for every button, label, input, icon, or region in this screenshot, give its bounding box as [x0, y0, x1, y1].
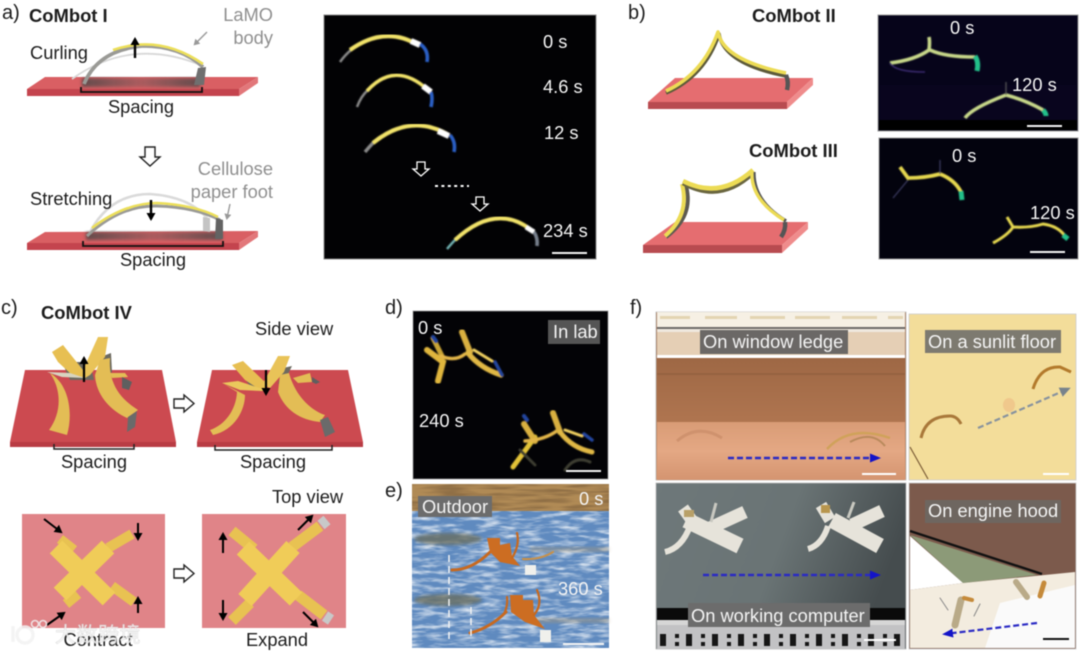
tag: On engine hood [928, 500, 1058, 521]
scale bar [552, 252, 587, 254]
CoMbot II diagram [648, 32, 813, 109]
watermark logo [13, 620, 46, 643]
robot 120 s [993, 217, 1068, 243]
scale bar [864, 639, 896, 641]
arrow: stretching down [150, 200, 152, 219]
label: spacing: Spacing [240, 451, 306, 472]
tag: in lab: In lab [553, 321, 598, 342]
scale bar [1043, 473, 1069, 475]
white foot [525, 565, 536, 575]
side view expanded [197, 356, 363, 447]
robots [940, 582, 1044, 625]
hollow arrows and dots [413, 162, 488, 211]
tag: On a sunlit floor [928, 331, 1056, 352]
robot frame 12 s [365, 125, 454, 152]
robot at 240 s [513, 413, 592, 470]
label: stretching: Stretching [30, 188, 112, 209]
robot 120 s [965, 82, 1046, 118]
label: contract: Contract [63, 629, 133, 650]
robot at 0 s [427, 332, 502, 381]
outdoor background [412, 484, 609, 648]
panel a: CoMbot I schematic [2, 2, 274, 270]
direction arrow [978, 389, 1068, 428]
bracket: spacing [83, 241, 223, 246]
panel b: photo CoMbot II [878, 15, 1078, 131]
white foot [540, 630, 551, 642]
label: side view: Side view [255, 318, 334, 339]
robot 0 s [890, 37, 978, 72]
timestamps: 12 s [544, 122, 579, 143]
panel b: CoMbot II and III schematics [628, 2, 838, 253]
arrow: curling up [134, 39, 136, 58]
panel b: photo CoMbot III [879, 138, 1078, 259]
timestamps [558, 488, 603, 599]
arrow: up [83, 358, 85, 382]
dashed guides [449, 555, 471, 640]
panel label a: a) [2, 2, 20, 24]
white robot left [665, 503, 745, 552]
arrow: to LaMO body [195, 32, 207, 44]
bracket: spacing [54, 444, 134, 449]
watermark [13, 620, 141, 647]
contract arrows [44, 519, 138, 625]
timestamps: 234 s [543, 220, 588, 241]
timestamps: 360 s [558, 578, 603, 599]
panel label e: e) [385, 480, 403, 502]
timestamps: 0 s [418, 317, 442, 338]
timestamps [543, 31, 588, 241]
side view contracted [10, 337, 176, 447]
timestamps: 120 s [1012, 74, 1057, 95]
blue direction arrow [703, 574, 878, 576]
label: spacing: Spacing [108, 96, 174, 117]
timestamps [418, 317, 464, 431]
label: spacing: Spacing [61, 451, 127, 472]
label: spacing: Spacing [120, 249, 186, 270]
timestamps: 0 s [543, 31, 567, 52]
hollow arrow down [140, 147, 160, 166]
top view expanded [202, 514, 346, 628]
robots [677, 431, 890, 449]
label: expand: Expand [246, 629, 308, 650]
panel f: label: f) [630, 297, 642, 319]
label: LaMO body: LaMO [223, 4, 273, 25]
heading: CoMbot IV: CoMbot IV [41, 302, 133, 323]
panel a: time-lapse photo [324, 15, 596, 259]
photo: on working computer [656, 483, 906, 649]
robot 0 s [893, 160, 962, 200]
blue direction arrow [728, 457, 878, 459]
orange robot at 360 s [470, 590, 545, 633]
panel c: CoMbot IV schematics [1, 297, 363, 650]
scale bar [1030, 251, 1065, 253]
robot frame 234 s [447, 218, 537, 249]
panel label d: d) [385, 297, 403, 319]
curling state diagram [27, 44, 258, 96]
label: top view: Top view [272, 486, 344, 507]
panel e: outdoor photo [385, 480, 609, 648]
timestamps: 0 s [579, 488, 603, 509]
robots [921, 367, 1071, 438]
scale bar [563, 643, 604, 645]
label: cellulose paper foot: paper foot [191, 181, 273, 202]
hollow arrow right [174, 395, 194, 412]
robot frame 4.6 s [357, 75, 432, 107]
scale bar [862, 473, 896, 475]
bracket: spacing [215, 445, 332, 450]
label: cellulose paper foot: Cellulose [198, 158, 273, 179]
panel label c: c) [1, 297, 18, 319]
timestamps: 4.6 s [543, 76, 583, 97]
scale bar [1027, 125, 1062, 127]
panel label b: b) [628, 2, 646, 24]
arrow: down [265, 370, 267, 394]
timestamps [950, 17, 1057, 95]
top view contracted [22, 514, 165, 628]
hollow arrow right [174, 565, 194, 582]
scale bar [566, 470, 601, 472]
timestamps: 0 s [950, 17, 974, 38]
stretching state diagram [27, 194, 258, 250]
label: LaMO body: body [233, 27, 274, 48]
timestamps: 120 s [1030, 202, 1075, 223]
heading: CoMbot II: CoMbot II [752, 5, 836, 26]
heading: CoMbot I: CoMbot I [29, 5, 108, 26]
heading: CoMbot III: CoMbot III [749, 140, 838, 161]
blue direction arrow [945, 623, 1037, 634]
label: curling: Curling [30, 42, 88, 63]
vent holes [660, 634, 900, 646]
white robot right [808, 502, 882, 549]
orange robot at 0 s [452, 533, 553, 570]
CoMbot III diagram [643, 170, 808, 253]
photo: on window ledge [656, 312, 906, 480]
timestamps: 240 s [419, 410, 464, 431]
timestamps: 0 s [952, 145, 976, 166]
expand arrows [223, 516, 317, 626]
label: cellulose paper foot [191, 158, 273, 202]
scale bar [1043, 638, 1069, 640]
bracket: spacing [81, 87, 202, 92]
tag: outdoor: Outdoor [422, 496, 488, 517]
tag: On working computer [691, 605, 865, 626]
photo: on engine hood [909, 483, 1076, 649]
arrow: to paper foot [227, 204, 230, 218]
label: LaMO body [223, 4, 274, 48]
watermark text: 大数跨境 [55, 624, 141, 647]
tag: On window ledge [703, 331, 843, 352]
panel d: in lab photo [385, 297, 608, 479]
timestamps [952, 145, 1075, 223]
robot frame 0 s [340, 36, 427, 62]
photo: on a sunlit floor [909, 314, 1076, 480]
